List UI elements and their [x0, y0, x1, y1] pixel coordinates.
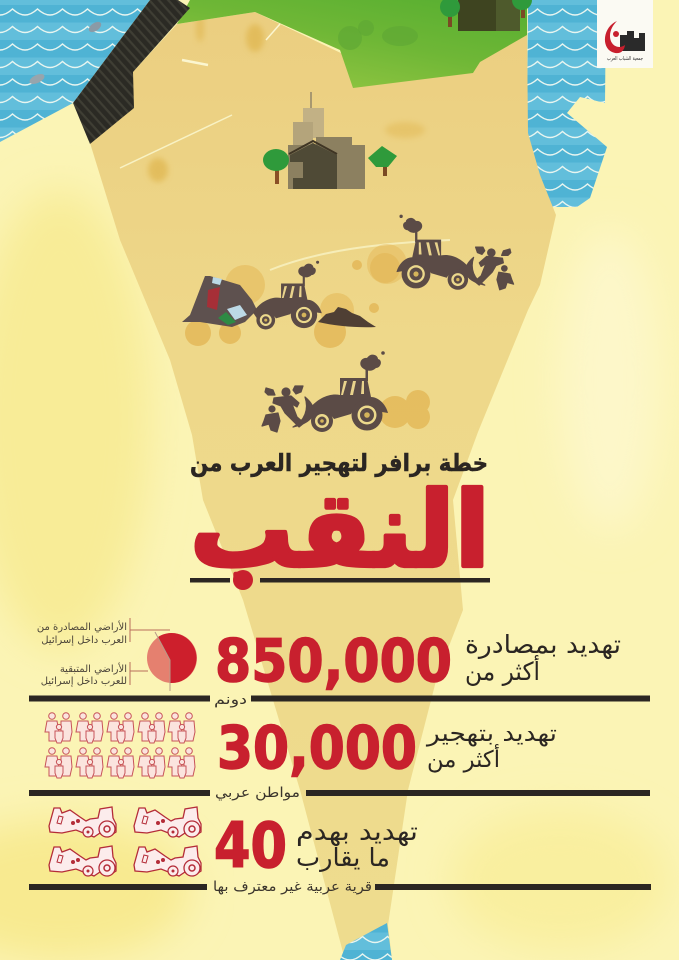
heading: subtitle: خطة برافر لتهجير العرب من [190, 449, 488, 477]
logo: جمعية الشباب العرب [607, 56, 643, 62]
icon: tree right of city [368, 146, 397, 176]
title underline [190, 578, 490, 582]
legend: confiscated lands [37, 620, 127, 646]
text: threat to demolish [296, 817, 418, 872]
logo [597, 0, 653, 68]
stat: 30,000: 30,000 [217, 713, 417, 782]
panel: green northern land [177, 0, 527, 88]
icon: bulldozer pushing people, upper right [396, 215, 514, 290]
text: threat to demolish: تهديد بهدم [296, 817, 418, 847]
panel: Negev land shape [90, 12, 556, 960]
stat: 850,000: 850,000 [215, 626, 452, 695]
row 3 divider with unit: قرية عربية غير معترف بها [213, 879, 372, 895]
icon: tree top right [512, 0, 532, 18]
dust clouds [185, 244, 430, 429]
legend: remaining lands: الأراضي المتبقية [60, 662, 127, 675]
icon: tree left of city [263, 149, 289, 184]
row 1 divider with unit [29, 692, 650, 708]
text: threat to confiscate [465, 630, 621, 686]
legend: remaining lands [41, 662, 127, 687]
row 1 divider with unit: دونم [214, 692, 247, 708]
icon: bulldozer demolishing house, middle [182, 261, 376, 329]
legend: confiscated lands: العرب داخل إسرائيل [41, 635, 127, 646]
text: threat to demolish: ما يقارب [296, 843, 390, 872]
black striped border wall [73, 0, 190, 144]
text: threat to confiscate: أكثر من [465, 654, 540, 686]
text: threat to displace: أكثر من [427, 744, 500, 773]
stat: 40: 40 [214, 809, 287, 882]
icon: city in green area [458, 0, 520, 31]
icon: bulldozer pushing people, lower [262, 351, 388, 432]
text: threat to displace [426, 721, 557, 773]
icon: central city buildings [288, 92, 365, 189]
icons: demolished villages [49, 807, 201, 876]
legend: remaining lands: للعرب داخل إسرائيل [41, 676, 127, 687]
text: threat to confiscate: تهديد بمصادرة [465, 630, 621, 660]
panel: southern Red Sea tip [340, 923, 392, 960]
row 3 divider with unit [29, 879, 651, 895]
panel: left sea with waves [0, 0, 150, 142]
row 2 divider with unit: مواطن عربي [215, 785, 300, 801]
panel: right sea with waves [527, 0, 607, 207]
row 2 divider with unit [29, 785, 650, 801]
chart: land pie [130, 618, 197, 691]
text: threat to displace: تهديد بتهجير [426, 721, 557, 747]
icon: tree top left [440, 0, 460, 27]
legend: confiscated lands: الأراضي المصادرة من [37, 620, 127, 633]
icons: families [45, 713, 195, 778]
heading: main title Negev: النقب [190, 470, 490, 591]
